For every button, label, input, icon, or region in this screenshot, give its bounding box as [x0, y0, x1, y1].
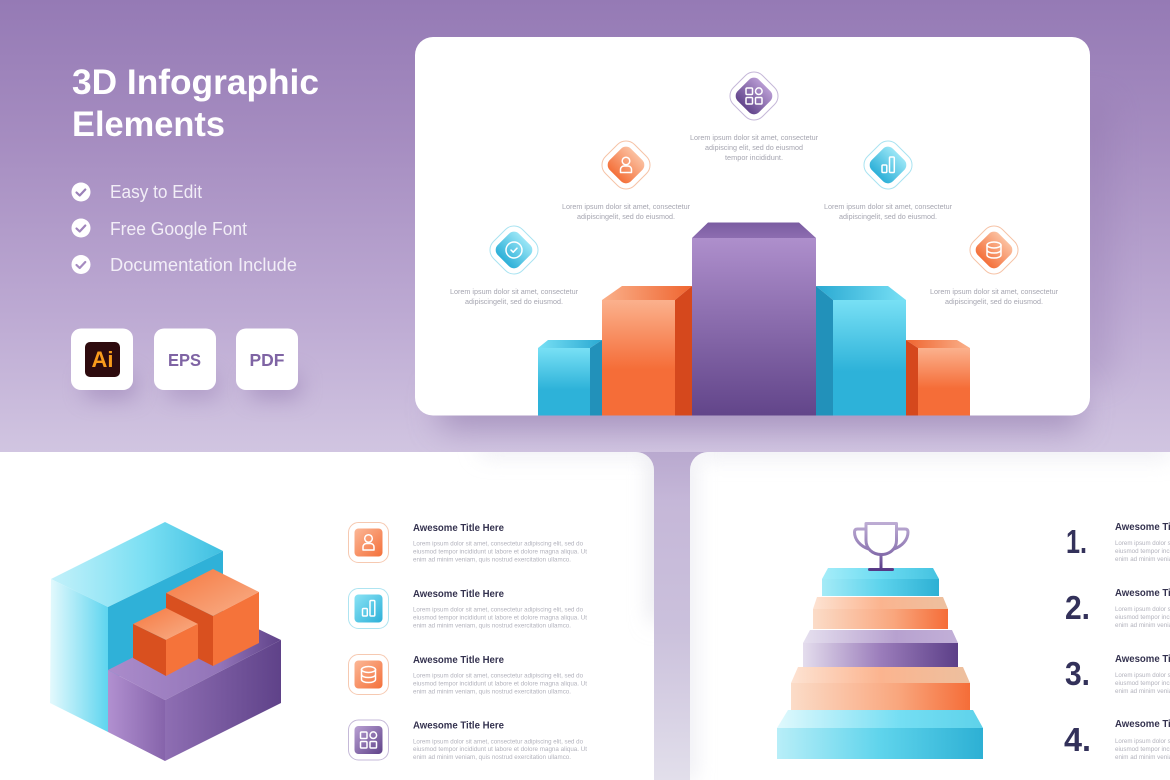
row text — [413, 654, 587, 696]
step 3 — [803, 630, 958, 667]
caption: bars — [824, 204, 953, 221]
row text: Lorem ipsum dolor sit amet, consectetur adipiscing elit, sed do — [413, 606, 583, 614]
bar: medium orange — [602, 286, 692, 416]
panel: bar chart slide — [415, 37, 1090, 416]
cube: small orange — [133, 608, 198, 676]
row text: eiusmod tempor incididunt ut labore et dolore magna aliqua. Ut — [413, 746, 587, 753]
item 2: 2. — [1065, 589, 1090, 626]
caption: apps: adipiscing elit, sed do eiusmod — [705, 145, 803, 152]
row text: enim ad minim veniam, quis nostrud exercitation ullamco. — [413, 556, 571, 564]
feature list — [72, 182, 297, 275]
row text: eiusmod tempor incididunt ut labore et dolore magna aliqua. Ut — [413, 680, 587, 688]
icon: bars — [348, 588, 388, 628]
caption: apps: Lorem ipsum dolor sit amet, consectetur — [690, 135, 819, 142]
bar: small orange — [906, 340, 970, 416]
badge: PDF — [236, 328, 298, 390]
item 4: 4. — [1064, 721, 1091, 758]
bar: medium blue — [816, 286, 906, 416]
panel: staircase slide — [682, 438, 1170, 780]
feature: documentation include: Documentation Include — [110, 255, 297, 275]
bar: tall purple — [692, 222, 816, 416]
row text: eiusmod tempor incididunt ut labore et dolore magna aliqua. Ut — [413, 614, 587, 622]
badge: EPS: EPS — [168, 350, 201, 370]
row text: Lorem ipsum dolor sit amet, consectetur adipiscing elit, sed do — [413, 738, 583, 746]
caption: user: Lorem ipsum dolor sit amet, consectetur — [562, 204, 691, 211]
title: Elements — [72, 105, 225, 144]
caption: bars: adipiscingelit, sed do eiusmod. — [839, 214, 937, 221]
item 3 — [1065, 653, 1170, 695]
feature: free google font: Free Google Font — [110, 219, 247, 239]
item 1 — [1066, 521, 1170, 563]
row text: Awesome Title Here — [413, 522, 504, 534]
step 1 — [822, 568, 939, 596]
item 3: 3. — [1065, 655, 1090, 692]
bar: small blue — [538, 340, 602, 416]
diamond icon: bars — [859, 136, 917, 194]
feature: easy to edit — [72, 182, 202, 202]
cube: large blue — [50, 522, 223, 732]
list row 3 — [348, 654, 587, 696]
icon: user — [348, 522, 388, 562]
list numbers and text — [1064, 521, 1170, 761]
panel: isometric slide — [0, 436, 680, 780]
row text: Lorem ipsum dolor sit amet, consectetur adipiscing elit, sed do — [413, 672, 583, 680]
block: purple base — [108, 612, 281, 761]
row text — [413, 588, 587, 630]
row text — [413, 522, 587, 564]
row text — [413, 720, 587, 761]
step 4 — [791, 667, 970, 710]
caption: database: Lorem ipsum dolor sit amet, consectetur — [930, 289, 1059, 296]
item 1: 1. — [1066, 523, 1087, 560]
title — [72, 63, 319, 144]
badge: EPS — [154, 328, 216, 390]
row text: eiusmod tempor incididunt ut labore et dolore magna aliqua. Ut — [413, 548, 587, 556]
icon: database — [348, 654, 388, 694]
caption: user: adipiscingelit, sed do eiusmod. — [577, 214, 675, 221]
step 2 — [813, 597, 948, 629]
row text: Awesome Title Here — [413, 654, 504, 666]
feature: easy to edit: Easy to Edit — [110, 182, 202, 202]
diamond icon: check — [485, 221, 543, 279]
badge: Ai — [71, 328, 133, 390]
row text: Awesome Title Here — [413, 720, 504, 732]
icon: apps — [348, 720, 388, 760]
caption: apps: tempor incididunt. — [725, 155, 783, 162]
caption: check: adipiscingelit, sed do eiusmod. — [465, 299, 563, 306]
row text: Lorem ipsum dolor sit amet, consectetur adipiscing elit, sed do — [413, 540, 583, 548]
caption: bars: Lorem ipsum dolor sit amet, consectetur — [824, 204, 953, 211]
caption: database: adipiscingelit, sed do eiusmod. — [945, 299, 1043, 306]
row text: enim ad minim veniam, quis nostrud exercitation ullamco. — [413, 688, 571, 696]
caption: check — [450, 289, 579, 306]
caption: check: Lorem ipsum dolor sit amet, consectetur — [450, 289, 579, 296]
caption: user — [562, 204, 691, 221]
diamond icon: apps — [725, 67, 783, 125]
badge: Ai: Ai — [92, 347, 114, 372]
item 2 — [1065, 587, 1170, 629]
row text: Awesome Title Here — [413, 588, 504, 600]
caption: database — [930, 289, 1059, 306]
icon: trophy — [854, 524, 908, 570]
list row 2 — [348, 588, 587, 630]
staircase — [777, 568, 983, 759]
step 5 — [777, 710, 983, 759]
cube: large orange — [166, 569, 259, 666]
caption: apps — [690, 135, 819, 162]
diamond icon: database — [965, 221, 1023, 279]
list row 1 — [348, 522, 587, 564]
list row 4 — [348, 720, 587, 761]
diamond icon: user — [597, 136, 655, 194]
row text: enim ad minim veniam, quis nostrud exercitation ullamco. — [413, 754, 571, 761]
row text: enim ad minim veniam, quis nostrud exercitation ullamco. — [413, 622, 571, 630]
title: 3D Infographic — [72, 63, 319, 102]
item 4 — [1064, 718, 1170, 761]
badge: PDF: PDF — [250, 350, 285, 370]
isometric cubes — [50, 522, 281, 761]
